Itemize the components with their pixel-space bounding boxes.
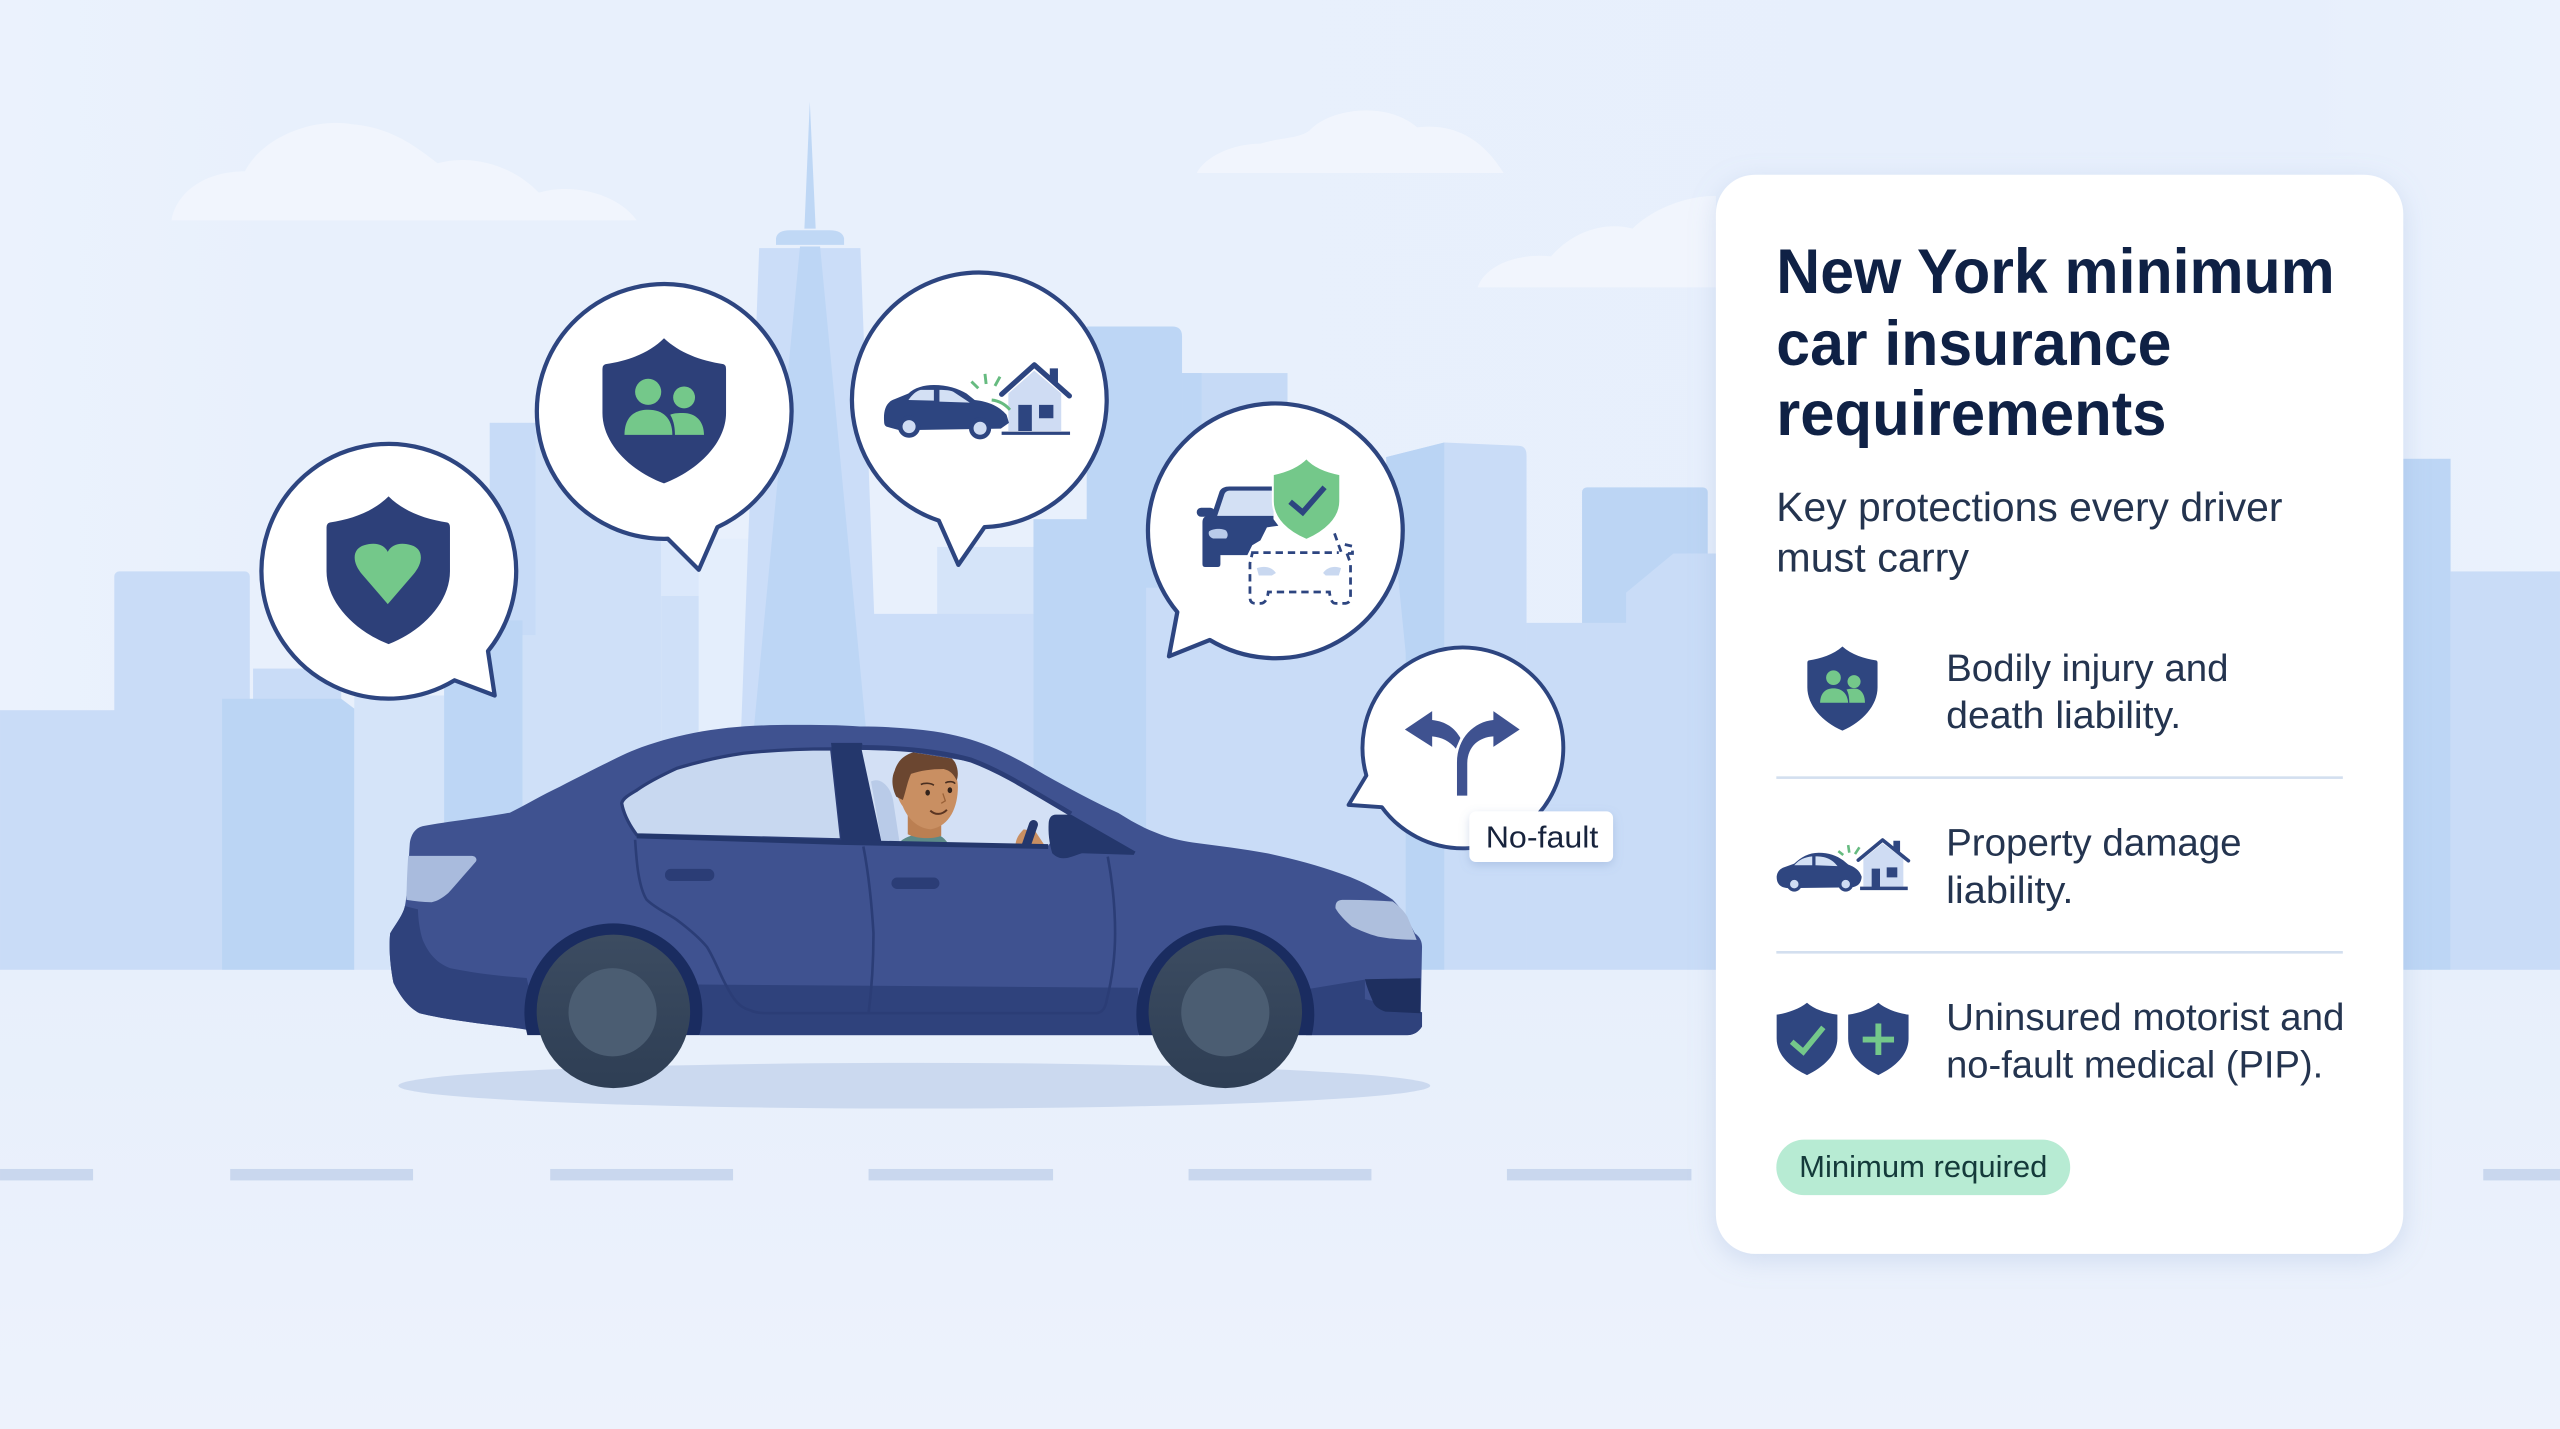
item 3 text — [1946, 996, 2344, 1087]
item 3 icon: shields with check and plus — [1777, 1003, 1909, 1075]
title: car insurance — [1776, 309, 2171, 379]
car body — [390, 725, 1422, 1035]
road lane dashes — [0, 1169, 2560, 1180]
sky background — [0, 0, 2560, 980]
front grille — [1365, 978, 1420, 1013]
title: New York minimum — [1776, 237, 2335, 307]
clouds — [171, 110, 1716, 287]
item 3 text: no-fault medical (PIP). — [1946, 1044, 2323, 1087]
item 2 text: liability. — [1946, 869, 2073, 912]
rear window — [622, 749, 842, 840]
icon: impact sparks — [971, 374, 1010, 410]
car lower sill band — [694, 984, 1138, 1035]
item 3 text: Uninsured motorist and — [1946, 996, 2344, 1039]
divider — [1776, 951, 2343, 954]
speech bubble: bodily injury shield with heart — [261, 444, 516, 699]
speech bubble: no-fault forked arrow — [1349, 647, 1563, 848]
subtitle — [1776, 484, 2282, 580]
item 1 text: Bodily injury and — [1946, 647, 2229, 690]
icon: people — [624, 379, 704, 435]
front window — [862, 750, 1071, 846]
item 2 text: Property damage — [1946, 822, 2242, 865]
icon: heart — [355, 544, 421, 604]
item 1 icon: shield with people — [1807, 647, 1878, 731]
minimum required badge — [1776, 1140, 2070, 1195]
headlight — [1335, 900, 1417, 940]
car lower rear shading — [390, 906, 539, 1032]
item 1 text — [1946, 647, 2229, 737]
icon: green shield with check — [1273, 458, 1340, 540]
icon: car side view — [884, 385, 1009, 437]
car ground shadow — [398, 1063, 1430, 1109]
item 2 text — [1946, 822, 2242, 912]
front wheel — [1136, 925, 1314, 1088]
icon: insured car — [1197, 487, 1278, 567]
minimum required badge: Minimum required — [1799, 1151, 2047, 1184]
no-fault label: No-fault — [1486, 821, 1599, 854]
subtitle: must carry — [1776, 534, 1970, 580]
panel: requirements card — [1716, 175, 2403, 1254]
icon: house — [1002, 365, 1070, 435]
window trim — [862, 747, 1071, 814]
door seams — [635, 840, 1115, 1013]
car with driver — [390, 725, 1422, 1088]
window sill line — [637, 836, 1048, 847]
window pillar — [831, 743, 882, 843]
divider — [1776, 776, 2343, 779]
city skyline — [0, 102, 2560, 980]
side mirror — [1049, 815, 1136, 858]
driver — [871, 751, 1045, 846]
road — [0, 970, 2560, 1429]
door handles — [665, 869, 714, 881]
speech bubble: shield with people — [537, 284, 792, 570]
item 1 text: death liability. — [1946, 694, 2181, 737]
icon: shield — [327, 496, 450, 644]
speech bubble: uninsured motorist — [1148, 403, 1403, 658]
icon: uninsured dashed car — [1250, 530, 1352, 603]
title — [1776, 237, 2335, 449]
tail light — [407, 856, 476, 902]
title: requirements — [1776, 379, 2167, 449]
speech bubble: car hitting house — [852, 273, 1107, 565]
item 2 icon: car and house — [1777, 840, 1908, 890]
icon: forked arrow — [1405, 711, 1520, 796]
subtitle: Key protections every driver — [1776, 484, 2282, 530]
icon: shield — [602, 338, 726, 483]
no-fault label — [1469, 811, 1613, 862]
rear wheel — [524, 923, 702, 1088]
